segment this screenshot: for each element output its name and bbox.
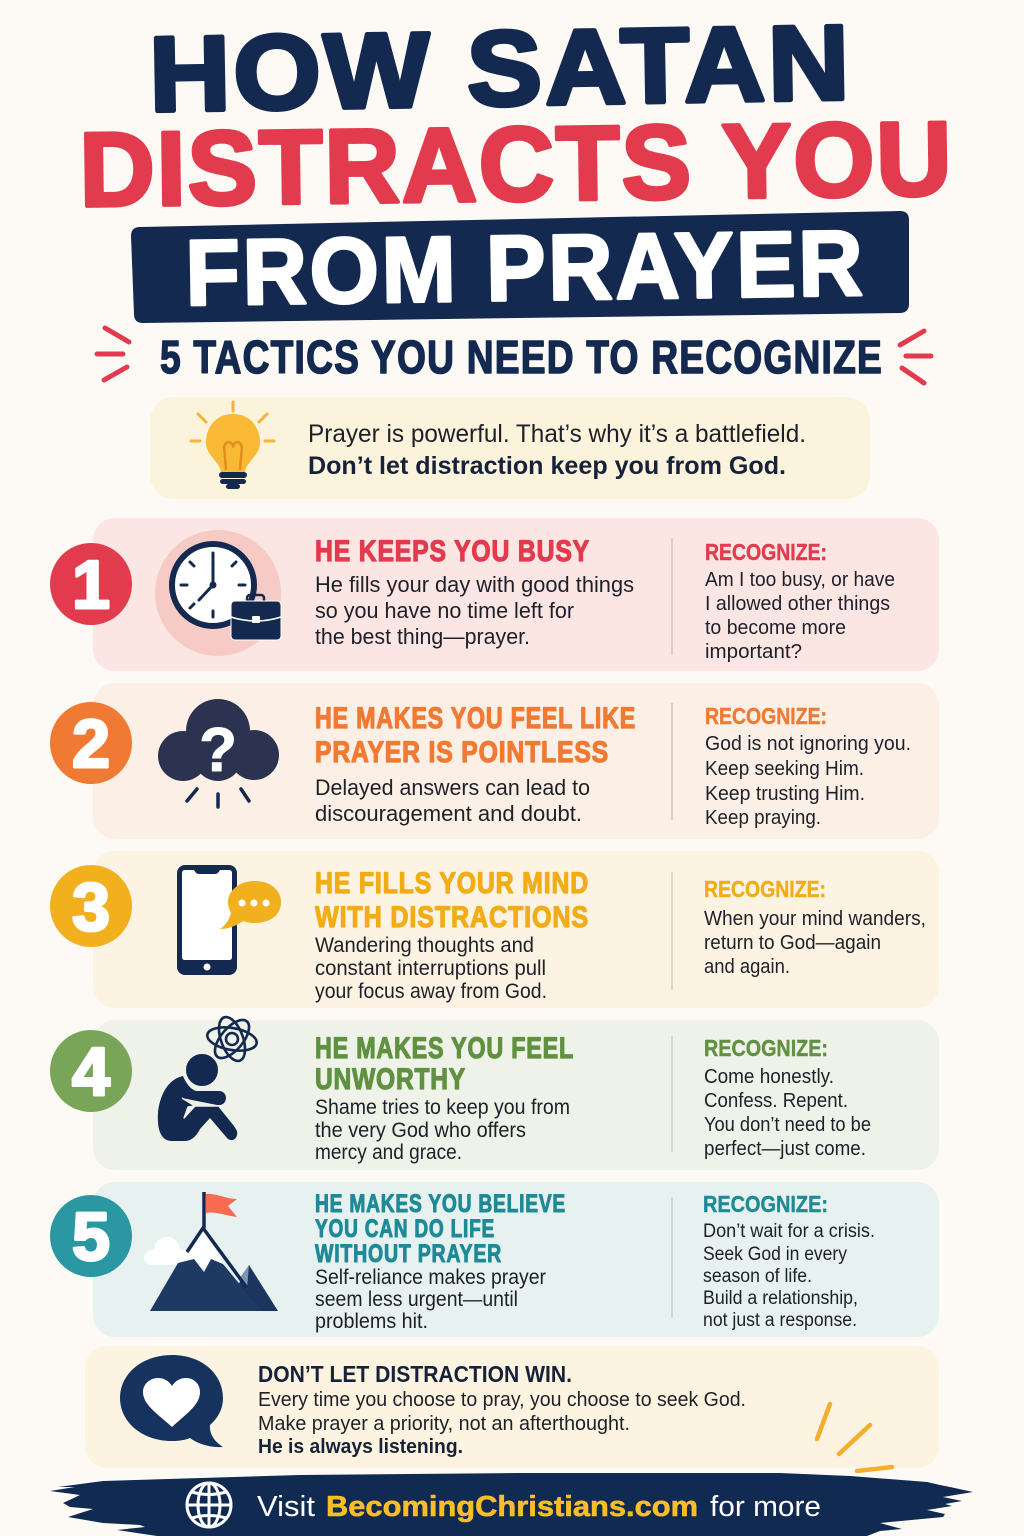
tactic 1 recognize: important?	[705, 641, 802, 663]
tactic 2 recognize: God is not ignoring you.	[705, 733, 911, 755]
panel: tactic 5	[50, 1182, 939, 1337]
number badge 5: 5	[72, 1199, 110, 1275]
tactic 2 heading	[315, 702, 636, 769]
tactic 2 description: Delayed answers can lead to	[315, 775, 590, 800]
tactic 5 heading: WITHOUT PRAYER	[315, 1240, 502, 1268]
tactic 4 heading	[315, 1032, 574, 1096]
tactic 2 recognize	[705, 703, 911, 829]
tactic 1 description	[315, 572, 634, 649]
number badge 2	[50, 702, 132, 784]
tactic 5 recognize: Build a relationship,	[703, 1288, 858, 1309]
intro text: Don’t let distraction keep you from God.	[308, 452, 786, 480]
tactic 5 heading: YOU CAN DO LIFE	[315, 1215, 495, 1243]
tactic 2 recognize: Keep seeking Him.	[705, 758, 864, 780]
panel: closing message	[85, 1346, 939, 1468]
number badge 1	[50, 543, 132, 625]
closing text: Every time you choose to pray, you choose to seek God.	[258, 1389, 746, 1411]
footer call to action: for more	[710, 1491, 821, 1523]
title	[79, 4, 954, 325]
tactic 4 description: Shame tries to keep you from	[315, 1096, 570, 1119]
icon: phone with chat bubble	[177, 865, 281, 975]
intro text	[308, 420, 806, 480]
panel: intro callout	[150, 397, 870, 499]
tactic 5 heading	[315, 1190, 566, 1268]
tactic 4 heading: UNWORTHY	[315, 1063, 466, 1096]
number badge 3	[50, 865, 132, 947]
tactic 3 description: constant interruptions pull	[315, 957, 546, 980]
tactic 2 recognize: Keep praying.	[705, 807, 821, 829]
tactic 4 recognize: RECOGNIZE:	[704, 1035, 828, 1061]
tactic 5 heading: HE MAKES YOU BELIEVE	[315, 1190, 566, 1218]
tactic 1 recognize: to become more	[705, 617, 846, 639]
tactic 1 description: He fills your day with good things	[315, 572, 634, 597]
tactic 3 heading	[315, 867, 589, 934]
tactic 1 recognize: RECOGNIZE:	[705, 539, 827, 565]
tactic 4 recognize: Come honestly.	[704, 1066, 834, 1088]
icon: globe	[187, 1483, 231, 1527]
tactic 3 recognize	[704, 876, 926, 978]
tactic 5 recognize	[703, 1191, 875, 1331]
panel: tactic 2	[50, 683, 939, 839]
icon: light bulb	[191, 402, 274, 489]
title line: distracts you: DISTRACTS YOU	[79, 101, 954, 229]
tactic 4 recognize: perfect—just come.	[704, 1138, 866, 1160]
tactic 1 description: so you have no time left for	[315, 598, 574, 623]
tactic 3 heading: WITH DISTRACTIONS	[315, 901, 589, 934]
footer call to action: BecomingChristians.com	[326, 1491, 698, 1523]
tactic 3 recognize: RECOGNIZE:	[704, 876, 826, 902]
tactic 2 heading: HE MAKES YOU FEEL LIKE	[315, 702, 636, 735]
tactic 3 description	[315, 934, 547, 1003]
tactic 2 description: discouragement and doubt.	[315, 801, 582, 826]
tactic 2 recognize: RECOGNIZE:	[705, 703, 827, 729]
closing text	[258, 1361, 746, 1458]
tactic 3 recognize: and again.	[704, 956, 790, 978]
tactic 4 recognize	[704, 1035, 871, 1160]
icon: storm cloud with question mark	[158, 699, 279, 807]
tactic 4 description	[315, 1096, 570, 1164]
tactic 5 recognize: Seek God in every	[703, 1244, 847, 1265]
intro text: Prayer is powerful. That’s why it’s a battlefield.	[308, 420, 806, 448]
tactic 1 description: the best thing—prayer.	[315, 624, 530, 649]
icon: mountain with flag	[144, 1192, 278, 1311]
yellow accent strokes	[817, 1404, 892, 1471]
icon: clock and briefcase	[155, 530, 281, 656]
icon: person hugging knees with tangled thoughts	[158, 1014, 259, 1141]
closing text: DON’T LET DISTRACTION WIN.	[258, 1361, 572, 1387]
tactic 3 recognize: When your mind wanders,	[704, 908, 926, 930]
tactic 4 recognize: You don’t need to be	[704, 1114, 871, 1136]
panel: tactic 1	[50, 518, 939, 671]
number badge 3: 3	[72, 869, 110, 945]
footer brush banner	[50, 1473, 973, 1536]
tactic 3 description: your focus away from God.	[315, 980, 547, 1003]
tactic 3 description: Wandering thoughts and	[315, 934, 534, 957]
tactic 1 recognize: Am I too busy, or have	[705, 569, 895, 591]
tactic 5 description: Self-reliance makes prayer	[315, 1266, 546, 1289]
footer call to action	[257, 1491, 821, 1523]
number badge 2: 2	[72, 706, 110, 782]
tactic 3 recognize: return to God—again	[704, 932, 881, 954]
panel: tactic 3	[50, 851, 939, 1008]
tactic 5 recognize: Don’t wait for a crisis.	[703, 1221, 875, 1242]
closing text: He is always listening.	[258, 1436, 463, 1458]
title line: how satan: HOW SATAN	[148, 4, 853, 134]
tactic 4 heading: HE MAKES YOU FEEL	[315, 1032, 574, 1065]
number badge 4	[50, 1030, 132, 1112]
number badge 1: 1	[72, 547, 110, 623]
tactic 4 recognize: Confess. Repent.	[704, 1090, 848, 1112]
tactic 4 description: the very God who offers	[315, 1119, 526, 1142]
tactic 4 description: mercy and grace.	[315, 1141, 462, 1164]
tactic 5 recognize: RECOGNIZE:	[703, 1191, 828, 1217]
icon: speech bubble with heart	[120, 1355, 223, 1447]
panel: tactic 4	[50, 1014, 939, 1170]
tactic 5 recognize: not just a response.	[703, 1310, 857, 1331]
footer call to action: Visit	[257, 1491, 315, 1523]
tactic 5 description: seem less urgent—until	[315, 1288, 518, 1311]
tactic 1 recognize: I allowed other things	[705, 593, 890, 615]
number badge 5	[50, 1195, 132, 1277]
tactic 5 description: problems hit.	[315, 1310, 428, 1333]
tactic 1 heading: HE KEEPS YOU BUSY	[315, 535, 590, 568]
tactic 2 recognize: Keep trusting Him.	[705, 783, 865, 805]
tactic 1 recognize	[705, 539, 895, 663]
tactic 5 description	[315, 1266, 546, 1333]
title banner: from prayer: FROM PRAYER	[185, 211, 866, 325]
closing text: Make prayer a priority, not an afterthought.	[258, 1413, 630, 1435]
tactic 3 heading: HE FILLS YOUR MIND	[315, 867, 589, 900]
tactic 5 recognize: season of life.	[703, 1266, 812, 1287]
tactic 2 heading: PRAYER IS POINTLESS	[315, 736, 609, 769]
tactic 2 description	[315, 775, 590, 826]
icon: storm cloud with question mark: ?	[199, 716, 237, 785]
number badge 4: 4	[72, 1034, 110, 1110]
